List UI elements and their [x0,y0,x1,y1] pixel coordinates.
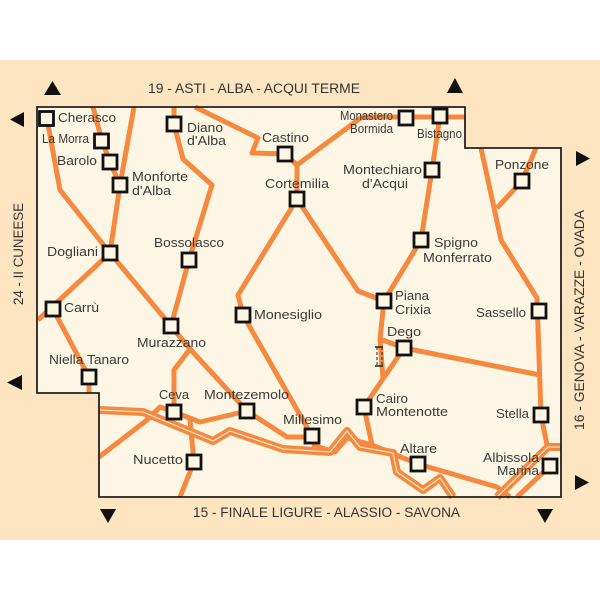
town labels: Millesimo [283,412,342,427]
town labels: La Morra [42,131,90,146]
town labels: Albissola [483,450,540,465]
map outline [37,107,561,497]
town labels: Cherasco [58,110,116,125]
town labels: Ceva [159,387,190,402]
town markers [40,109,557,473]
town labels: Monesiglio [254,307,322,322]
town labels: d'Alba [187,133,227,148]
town labels: Carrù [64,300,99,315]
town labels: Montezemolo [204,387,289,402]
road network [38,107,550,497]
town labels: Stella [496,406,530,421]
heading: east destinations: 16 - GENOVA - VARAZZE - OVADA [572,210,587,430]
town labels: Ponzone [495,157,549,172]
town labels: Monferrato [423,250,492,265]
town labels: Crixia [395,302,432,317]
town labels: Cairo [376,391,408,406]
town labels: Sassello [476,305,526,320]
beige background band [0,60,600,540]
town labels: Nucetto [133,452,183,467]
town labels: Niella Tanaro [49,352,129,367]
town labels: Bistagno [417,126,462,141]
town labels: Piana [395,288,430,303]
town labels: d'Acqui [362,176,408,191]
town labels: Monforte [132,169,188,184]
town labels: Cortemilia [265,176,330,191]
town labels: Murazzano [137,335,206,350]
town labels: Spigno [434,235,478,250]
town labels: Diano [187,120,223,135]
icon: bridge [375,347,383,366]
town labels: Barolo [57,153,97,168]
heading: south destinations: 15 - FINALE LIGURE - ALASSIO - SAVONA [193,505,460,520]
town labels: Bossolasco [154,235,224,250]
town labels: Bormida [350,121,394,136]
town labels: Montechiaro [343,162,422,177]
town labels: Marina [497,463,540,478]
direction arrows [7,78,590,523]
town labels: Dogliani [47,244,98,259]
motorway [99,410,561,497]
town labels: Montenotte [376,404,448,419]
town labels: Monastero [340,108,393,123]
town labels: d'Alba [132,183,172,198]
town labels: Dego [387,324,421,339]
town labels [42,108,549,478]
town labels: Altare [400,441,437,456]
heading: north destinations: 19 - ASTI - ALBA - ACQUI TERME [148,81,360,96]
town labels: Castino [262,130,309,145]
heading: west destinations: 24 - II CUNEESE [11,203,26,305]
map panel [37,107,561,497]
